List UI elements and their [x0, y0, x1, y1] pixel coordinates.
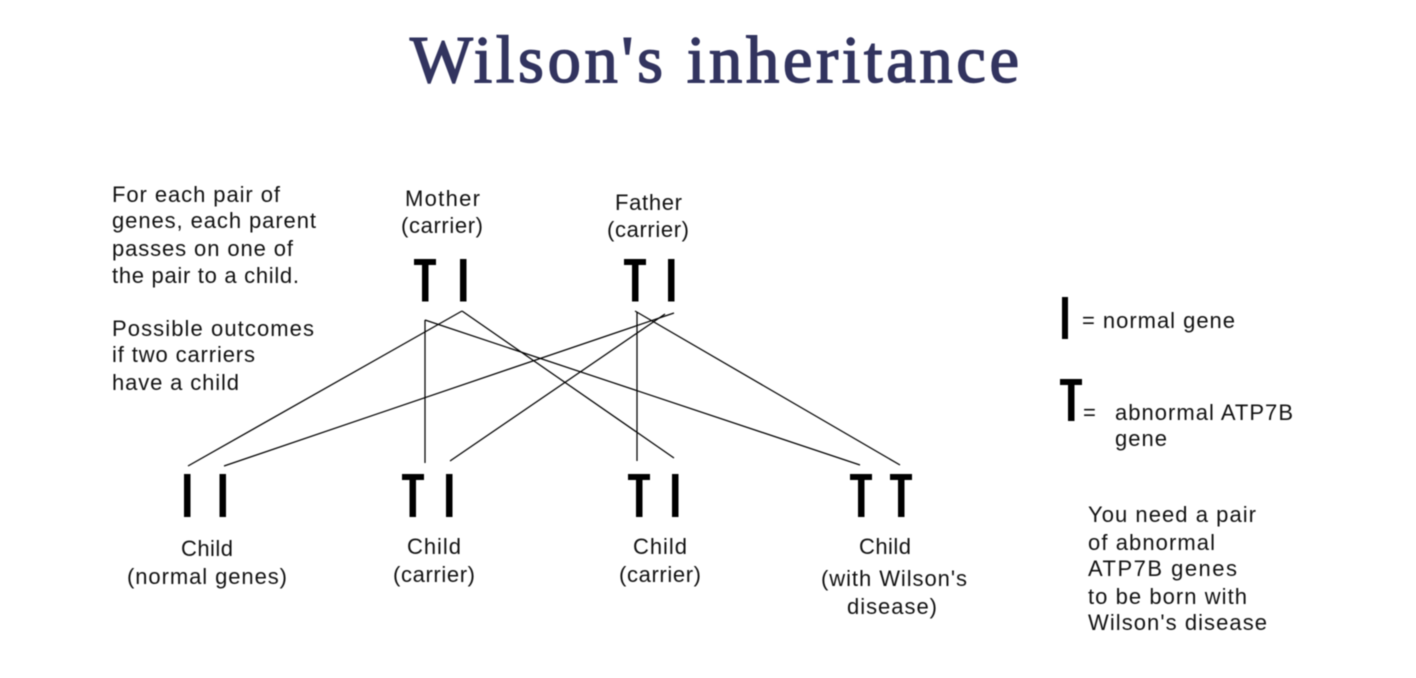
label: child carrier 2: Child	[633, 534, 687, 559]
text block: note: You need a pair	[1088, 502, 1256, 527]
label: child normal: Child	[181, 536, 233, 561]
label: father: (carrier)	[607, 217, 689, 242]
label: child normal	[127, 536, 287, 589]
text block: explanation: have a child	[112, 370, 239, 395]
label: child normal: (normal genes)	[127, 564, 287, 589]
text block: note: ATP7B genes	[1088, 556, 1237, 581]
icon: child normal genes	[184, 474, 226, 517]
icon: child carrier genes 2	[628, 474, 678, 517]
legend: abnormal gene: =	[1083, 400, 1096, 425]
inheritance lines	[188, 311, 900, 466]
label: child with disease	[821, 534, 967, 619]
label: child carrier 2: (carrier)	[619, 562, 701, 587]
text block: note: of abnormal	[1088, 530, 1215, 555]
legend: abnormal gene	[1060, 379, 1293, 451]
icon: child carrier genes 1	[402, 474, 452, 517]
title: Wilson's inheritance	[410, 24, 1019, 97]
label: mother: (carrier)	[401, 213, 483, 238]
label: mother: Mother	[405, 186, 480, 211]
icon: child affected genes	[850, 474, 912, 517]
legend: abnormal gene: gene	[1115, 426, 1167, 451]
label: child carrier 1: (carrier)	[393, 562, 475, 587]
icon: mother genes	[414, 259, 466, 302]
label: mother	[401, 186, 483, 238]
label: father: Father	[615, 190, 682, 215]
text block: note	[1088, 502, 1267, 635]
label: child with disease: disease)	[847, 594, 937, 619]
icon: father genes	[624, 259, 674, 302]
label: child carrier 1: Child	[407, 534, 461, 559]
diagram	[112, 182, 1293, 635]
legend: abnormal gene: abnormal ATP7B	[1115, 400, 1293, 425]
label: child carrier 1	[393, 534, 475, 587]
label: child carrier 2	[619, 534, 701, 587]
text block: explanation	[112, 182, 316, 395]
text block: explanation: Possible outcomes	[112, 316, 314, 341]
text block: explanation: For each pair of	[112, 182, 281, 207]
text block: explanation: genes, each parent	[112, 208, 316, 233]
label: child with disease: Child	[859, 534, 911, 559]
text block: explanation: the pair to a child.	[112, 263, 299, 288]
text block: explanation: passes on one of	[112, 236, 294, 261]
text block: note: to be born with	[1088, 584, 1247, 609]
text block: note: Wilson's disease	[1088, 610, 1267, 635]
text block: explanation: if two carriers	[112, 342, 255, 367]
label: father	[607, 190, 689, 242]
label: child with disease: (with Wilson's	[821, 566, 967, 591]
legend: normal gene	[1062, 297, 1235, 339]
legend: normal gene: = normal gene	[1082, 308, 1235, 333]
